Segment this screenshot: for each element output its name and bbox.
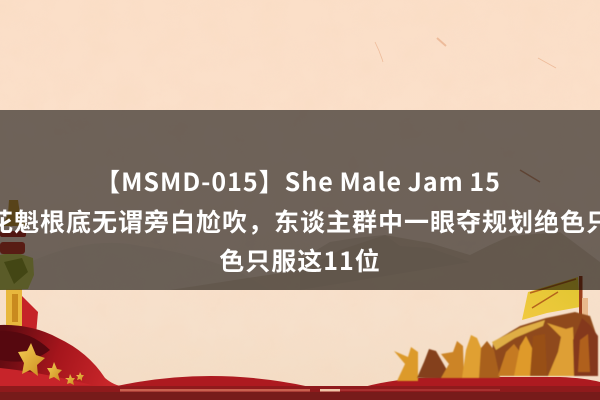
red ribbon base [0, 376, 600, 400]
figure 1 [394, 347, 418, 381]
distant mountains [30, 232, 600, 290]
figure 2 [417, 349, 447, 378]
star small [65, 374, 75, 385]
translucent title band [0, 110, 600, 290]
yellow flag [522, 276, 588, 320]
star tiny [76, 372, 84, 381]
figure 8 [530, 334, 547, 376]
monument column [0, 200, 38, 335]
figure 3 [441, 341, 464, 378]
figure 5 [479, 341, 500, 378]
figure 6 [498, 344, 520, 376]
red flag behind column [18, 296, 38, 335]
figure 10 [573, 318, 598, 376]
back relief [490, 312, 598, 376]
star large [18, 343, 45, 376]
flag swoosh left [0, 325, 120, 392]
gold steps [492, 320, 545, 350]
title line 1: 【MSMD-015】She Male Jam 15 [95, 163, 501, 199]
figure 4 [462, 335, 484, 378]
figure 7 [514, 336, 532, 376]
star medium [47, 362, 62, 381]
figure 9 [547, 323, 584, 376]
title line 3: 色只服这11位 [219, 242, 381, 278]
statue group [394, 312, 598, 381]
